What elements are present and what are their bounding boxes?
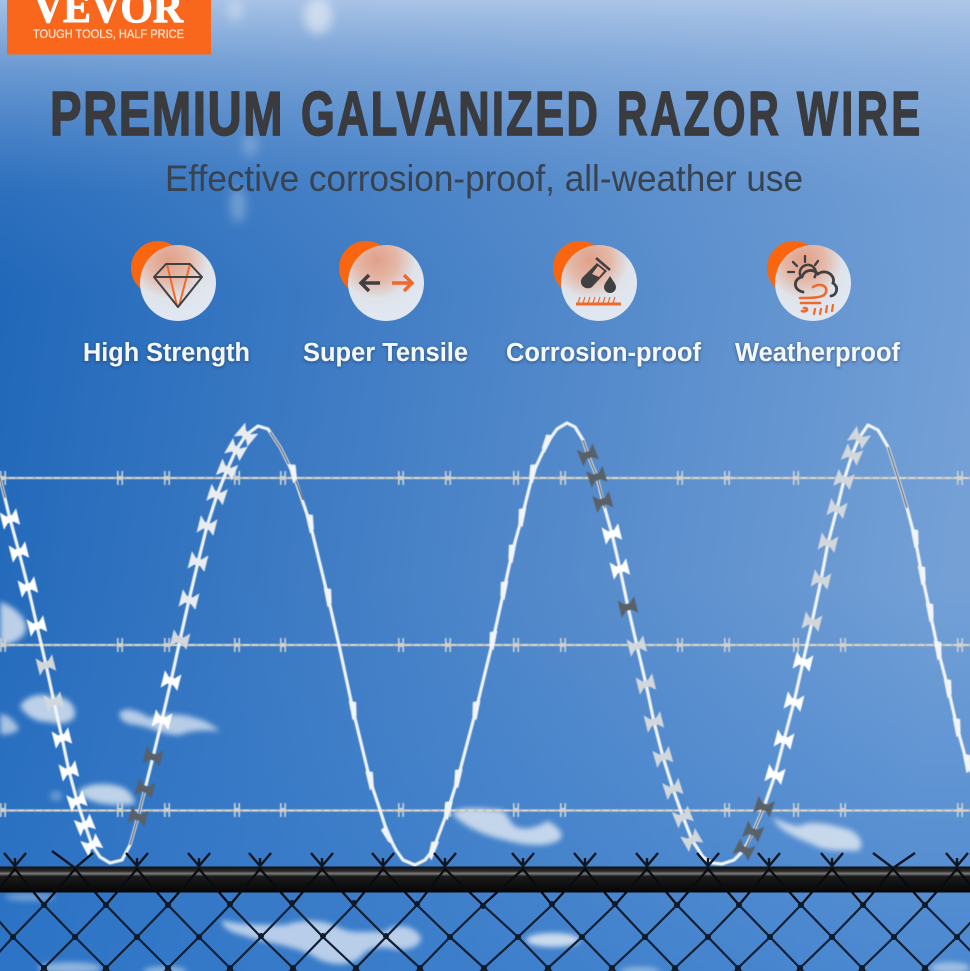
title: RAZOR bbox=[617, 80, 779, 149]
barbed wires bbox=[0, 471, 970, 817]
feature: High Strength bbox=[83, 241, 250, 367]
icon: sun, cloud and wind bbox=[767, 241, 851, 321]
chain-link fence bbox=[0, 851, 970, 971]
label: High Strength bbox=[83, 339, 250, 367]
title bbox=[50, 79, 920, 149]
title: PREMIUM bbox=[50, 79, 283, 149]
icon: diamond bbox=[131, 241, 216, 321]
razor wire coil bbox=[0, 423, 970, 865]
subtitle: Effective corrosion-proof, all-weather use bbox=[165, 158, 803, 199]
feature: Super Tensile bbox=[303, 241, 468, 367]
logo: VEVOR bbox=[7, 0, 211, 54]
feature: Weatherproof bbox=[735, 241, 900, 367]
title: WIRE bbox=[797, 81, 920, 149]
icon: test tube and drop bbox=[553, 241, 637, 321]
mesh diagonals bbox=[0, 869, 970, 971]
mesh knots bbox=[13, 903, 957, 968]
label: Corrosion-proof bbox=[506, 339, 701, 367]
logo: VEVOR: TOUGH TOOLS, HALF PRICE bbox=[33, 29, 184, 41]
label: Super Tensile bbox=[303, 339, 468, 367]
fence top rail bbox=[0, 866, 970, 892]
title: GALVANIZED bbox=[301, 81, 598, 149]
feature: Corrosion-proof bbox=[506, 241, 701, 367]
fence top twists bbox=[4, 851, 968, 870]
label: Weatherproof bbox=[735, 339, 900, 367]
icon: opposing arrows bbox=[339, 241, 424, 321]
